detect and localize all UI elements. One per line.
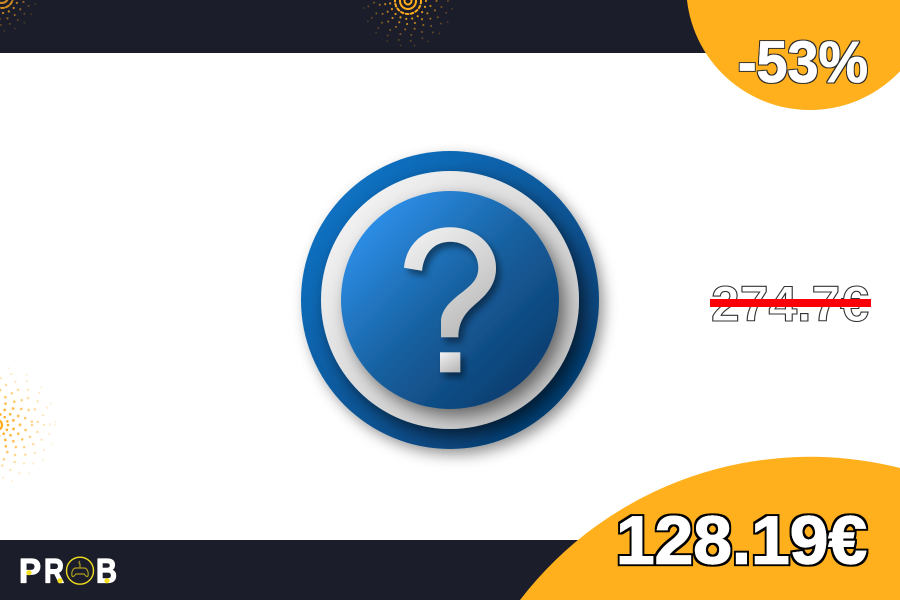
question mark glyph <box>404 227 496 372</box>
discount percentage: -53% <box>738 30 868 95</box>
discount badge <box>686 0 900 110</box>
final price badge <box>520 457 900 600</box>
logo: PROB: R <box>44 552 64 590</box>
final price: 128.19€ <box>616 502 867 578</box>
logo: PROB <box>19 552 117 590</box>
logo: PROB: P <box>19 552 41 590</box>
dotted halo: top left <box>0 0 36 31</box>
dotted halo: left edge <box>0 367 55 483</box>
logo: PROB: B <box>96 552 117 590</box>
top dark band <box>0 0 900 53</box>
bottom dark band <box>0 540 900 600</box>
red strikethrough <box>710 299 871 307</box>
icon: question mark button <box>301 151 599 449</box>
crossed-out original price: 274.7€ <box>711 276 869 332</box>
dotted halo: top centre <box>363 0 453 46</box>
